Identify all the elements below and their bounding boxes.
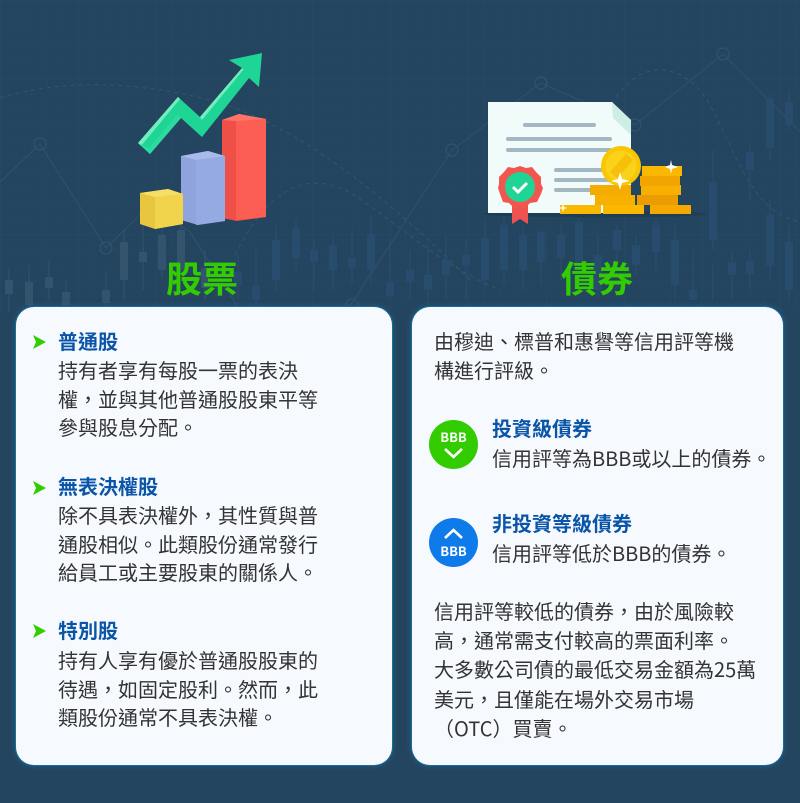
text: special stock: 待遇，如固定股利。然而，此 bbox=[58, 674, 318, 702]
icon: yellow cube bbox=[140, 189, 183, 229]
text: bond notes: （OTC）買賣。 bbox=[434, 713, 572, 742]
heading: common stock: 普通股 bbox=[58, 326, 118, 355]
title: stocks: 股票 bbox=[166, 251, 238, 303]
text: bond notes: 高，通常需支付較高的票面利率。 bbox=[434, 625, 734, 654]
text: non-voting stock: 給員工或主要股東的關係人。 bbox=[58, 557, 318, 586]
text: non-voting stock bbox=[58, 500, 318, 586]
text: non-voting stock: 通股相似。此類股份通常發行 bbox=[58, 529, 318, 558]
text: non-voting stock: 除不具表決權外，其性質與普 bbox=[58, 500, 318, 529]
text: special stock: 類股份通常不具表決權。 bbox=[58, 702, 278, 731]
icon: certificate with coins bbox=[483, 102, 707, 224]
title: bonds: 債券 bbox=[561, 251, 633, 303]
icon: rosette badge bbox=[498, 166, 543, 224]
heading: non-investment grade: 非投資等級債券 bbox=[492, 508, 632, 537]
panel: stocks bbox=[16, 307, 392, 765]
icon: investment grade badge: BBB bbox=[440, 427, 467, 446]
text: investment grade: 信用評等為BBB或以上的債券。 bbox=[492, 443, 771, 472]
heading: investment grade: 投資級債券 bbox=[492, 413, 592, 442]
icon: stock growth bars and arrow bbox=[138, 53, 266, 229]
icon: document bbox=[488, 102, 631, 213]
text: bond intro: 由穆迪、標普和惠譽等信用評等機 bbox=[434, 326, 734, 355]
shadow bbox=[483, 210, 707, 218]
text: common stock: 權，並與其他普通股股東平等 bbox=[58, 384, 318, 412]
text: bond notes: 信用評等較低的債券，由於風險較 bbox=[434, 596, 734, 625]
panel: bonds bbox=[412, 307, 783, 765]
icon: blue bar bbox=[181, 151, 225, 225]
icon: red bar bbox=[222, 114, 266, 221]
text: common stock: 持有者享有每股一票的表決 bbox=[58, 355, 298, 384]
heading: special stock: 特別股 bbox=[58, 615, 118, 644]
icon: non-investment grade badge: BBB bbox=[440, 541, 467, 560]
text: bond notes: 大多數公司債的最低交易金額為25萬 bbox=[434, 654, 756, 683]
text: common stock bbox=[58, 355, 318, 441]
text: bond notes: 美元，且僅能在場外交易市場 bbox=[434, 684, 694, 713]
text: bond intro: 構進行評級。 bbox=[434, 354, 554, 384]
text: special stock bbox=[58, 645, 318, 731]
heading: non-voting stock: 無表決權股 bbox=[58, 471, 158, 500]
icon: non-investment grade badge bbox=[429, 518, 478, 567]
text: special stock: 持有人享有優於普通股股東的 bbox=[58, 645, 318, 674]
icon: coin stacks bbox=[559, 146, 691, 214]
text: non-investment grade: 信用評等低於BBB的債券。 bbox=[492, 538, 731, 567]
text: bond intro bbox=[434, 326, 734, 384]
icon: investment grade badge bbox=[429, 420, 478, 469]
text: bond notes bbox=[434, 596, 756, 742]
icon: green rising arrow bbox=[138, 53, 262, 154]
text: common stock: 參與股息分配。 bbox=[58, 412, 198, 441]
